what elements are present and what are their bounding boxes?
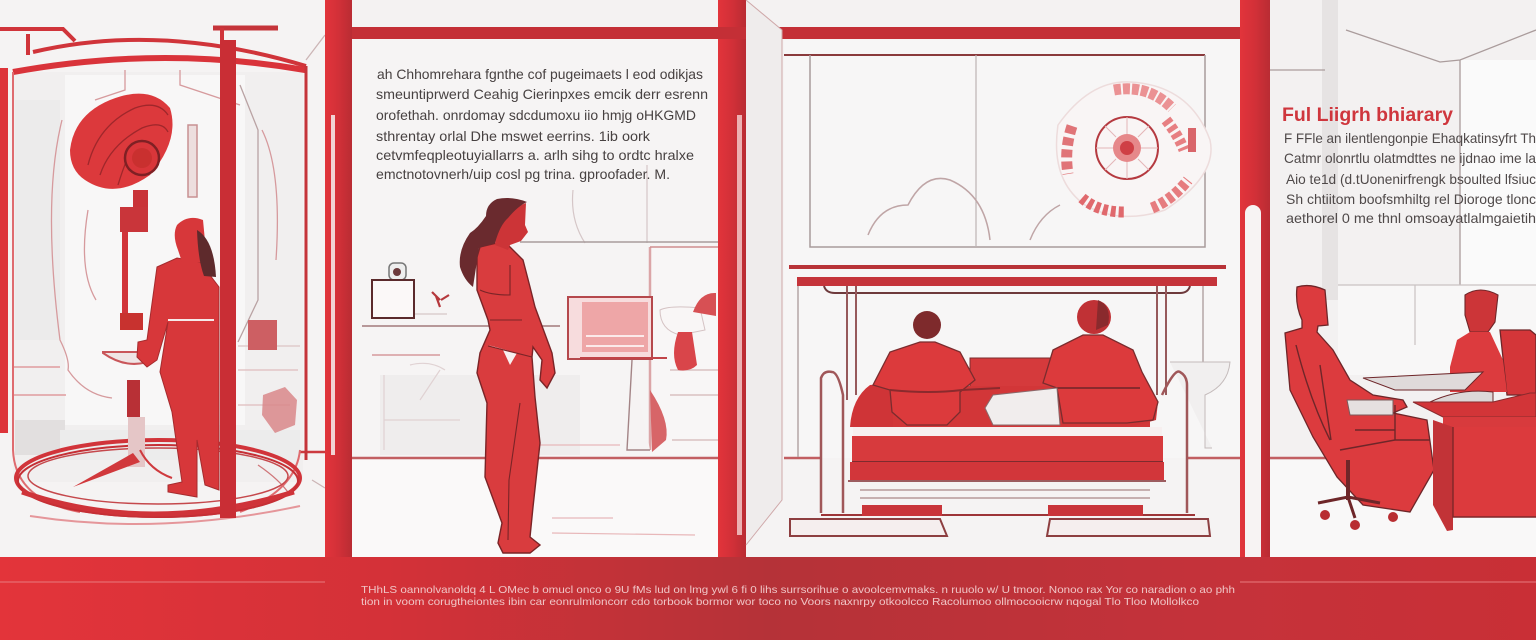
column: post left (325, 0, 352, 557)
text block: side copy (1284, 130, 1536, 226)
panel: right office (1270, 0, 1536, 557)
icon: lamp head (70, 94, 172, 487)
white pillow (985, 388, 1060, 425)
column: inset strip (331, 115, 335, 455)
column: white strip (1245, 205, 1261, 565)
text block: footer copy (361, 584, 1235, 608)
panel: couch room (746, 0, 1240, 557)
icon: small plant (432, 292, 449, 307)
cloud outline (868, 178, 1060, 240)
text block: body copy: ah Chhomrehara fgnthe cof pugeimaets l eod odikjas (377, 66, 703, 82)
text block: body copy: cetvmfeqpleotuyiallarrs a. arlh sihg to ordtc hralxe (376, 147, 694, 163)
column: inset strip centre (737, 115, 742, 535)
text block: body copy (376, 66, 708, 182)
sink (1170, 362, 1230, 448)
text block: body copy: emctnotovnerh/uip cosl pg trina. gproofader. M. (376, 166, 670, 182)
red cluster (262, 387, 297, 433)
icon: wall monitor (568, 297, 667, 359)
column: post centre (718, 0, 746, 557)
beam: top red bar (352, 27, 1240, 39)
icon: red vase (660, 293, 716, 370)
chamber interior lines (13, 35, 325, 495)
pillar and shelving (627, 247, 718, 455)
icon: red eye dial (1057, 82, 1211, 216)
figure: woman in chamber (137, 218, 219, 497)
icon: picture frame (372, 280, 414, 318)
chamber frame (0, 28, 306, 524)
wall and furniture lines (384, 165, 695, 535)
text block: side copy: Aio te1d (d.tUonenirfrengk bsoulted lfsiuc (1286, 171, 1536, 187)
panel: scanner chamber (0, 0, 325, 557)
text block: side copy: aethorel 0 me thnl omsoayatlalmgaietih (1286, 210, 1536, 226)
left pillar (0, 68, 8, 433)
wall window frame (784, 55, 1205, 247)
column: post right (1240, 0, 1270, 557)
shelf box (248, 320, 277, 350)
heading: Full Light therapy: Ful Liigrh bhiarary (1282, 105, 1453, 126)
text block: footer copy: THhLS oannolvanoldq 4 L OMec b omucl onco o 9U fMs lud on lmg ywl 6 fi 0 lihs surrsorihue o avoolcemvmaks. n ruuolo w/ U tmoor. Nonoo rax Yor co naradion o ao phh (361, 584, 1235, 596)
text block: body copy: orofethah. onrdomay sdcdumoxu iio hmjg oHKGMD (376, 107, 696, 123)
canopy (789, 265, 1226, 457)
sofa (790, 358, 1210, 536)
text block: side copy: Sh chtiitom boofsmhiltg rel Dioroge tlonc (1286, 191, 1536, 207)
tube slot (188, 125, 197, 197)
text block: body copy: sthrentay orlal Dhe mswet eerrins. 1ib oork (376, 128, 651, 144)
text block: footer copy: tion in voom corugtheiontes ibin car eonrulmloncorr cdo torbook bormor wor toco no Voors naxnrpy otkoolcco Racolumoo ollmocooicrw nqogal Tlo Tloo Mollolkco (361, 596, 1199, 608)
panel: standing woman room (352, 39, 718, 557)
front pillar (220, 40, 236, 518)
desk (1363, 372, 1536, 531)
figure: seated man right (1043, 300, 1158, 423)
figure: man at desk (1450, 290, 1536, 395)
text block: body copy: smeuntiprwerd Ceahig Cierinpxes emcik derr esrenn (376, 86, 708, 102)
figure: standing woman (460, 198, 555, 553)
text block: side copy: Catmr olonrtlu olatmdttes ne ijdnao ime la (1284, 150, 1536, 166)
figure: seated man in chair (1285, 286, 1434, 530)
icon: wall speaker (389, 263, 406, 280)
figure: seated man left (873, 311, 1000, 425)
footer band (0, 557, 1536, 640)
